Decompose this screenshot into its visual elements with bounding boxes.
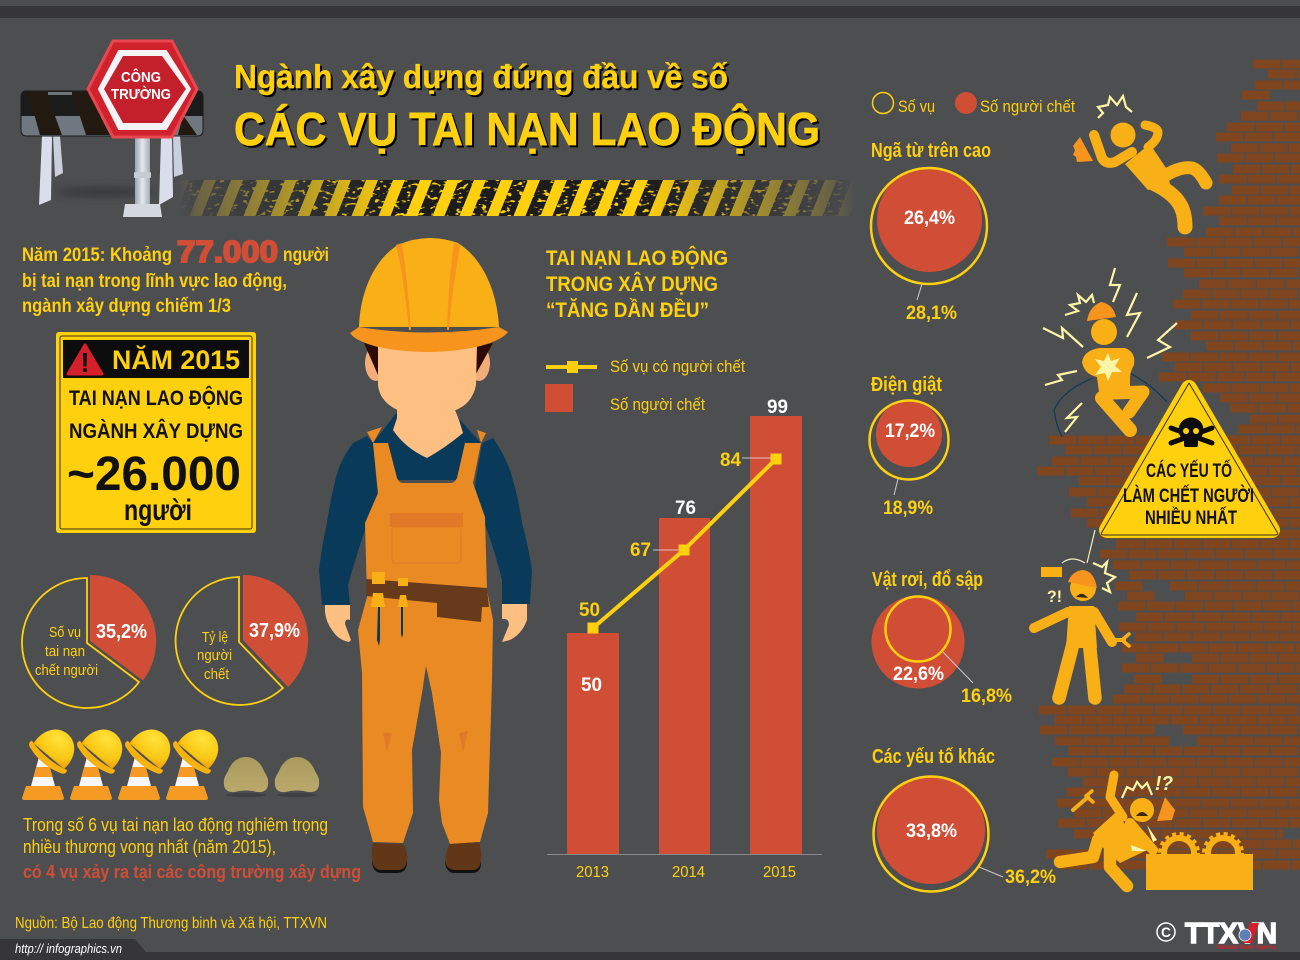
panel: điện giật: 17,2%: [885, 421, 935, 442]
pie chart: số vụ tai nạn chết người: tai nạn: [45, 644, 85, 660]
website: http:// infographics.vn: [15, 941, 122, 956]
panel: 2015 warning sign: NGÀNH XÂY DỰNG: [69, 419, 243, 443]
brick wall: [1037, 64, 1300, 865]
icon: road barrier and construction sign: [21, 41, 203, 217]
icon: road barrier and construction sign: CÔNG: [121, 68, 161, 86]
heading: chart title: “TĂNG DẦN ĐỀU”: [546, 299, 709, 322]
icon: worker struck by falling object: ?!: [1047, 587, 1062, 606]
panel: ngã từ trên cao: [871, 140, 991, 324]
heading: chart title: TRONG XÂY DỰNG: [546, 272, 718, 296]
intro text: người: [283, 245, 329, 266]
value labels: 50: [581, 675, 602, 696]
panel: vật rơi, đổ sập: 16,8%: [961, 686, 1012, 707]
year labels: 2013: [576, 864, 609, 881]
panel: 2015 warning sign: !: [80, 347, 90, 378]
heading: chart title: [546, 246, 728, 322]
intro text: [22, 234, 329, 317]
intro text: Năm 2015: Khoảng: [22, 245, 172, 266]
warning triangle: deadliest factors: CÁC YẾU TỐ: [1146, 460, 1232, 482]
logo: TTXVN: TTXVN: [1185, 918, 1277, 950]
panel: 2015 warning sign: NĂM 2015: [112, 344, 240, 375]
pie chart: tỷ lệ người chết: người: [197, 648, 232, 664]
panel: điện giật: 18,9%: [883, 498, 933, 519]
warning triangle: deadliest factors: LÀM CHẾT NGƯỜI: [1123, 485, 1254, 507]
pie chart: số vụ tai nạn chết người: chết người: [35, 663, 98, 679]
circle legend: [872, 92, 1075, 116]
chart legend: Số vụ có người chết: [610, 357, 745, 376]
bottom dark band: [0, 939, 1300, 960]
panel: ngã từ trên cao: 28,1%: [906, 303, 957, 324]
icon: worker caught in machine: [1060, 773, 1253, 890]
pie chart: tỷ lệ người chết: chết: [204, 667, 229, 683]
tool belt: [366, 579, 489, 622]
year labels: [576, 864, 796, 881]
icon: warning triangle: [68, 345, 102, 374]
undershirt and collar: [373, 412, 481, 480]
ears: [365, 345, 387, 381]
pie chart: tỷ lệ người chết: Tỷ lệ: [202, 630, 228, 646]
panel: điện giật: Điện giật: [871, 374, 942, 396]
year labels: 2015: [763, 864, 796, 881]
icon: falling worker: [1073, 96, 1206, 227]
neck: [393, 405, 463, 458]
title: CÁC VỤ TAI NẠN LAO ĐỘNG: [234, 103, 820, 155]
panel: 2015 warning sign: TAI NẠN LAO ĐỘNG: [69, 386, 243, 410]
warning triangle: deadliest factors: [1101, 383, 1278, 535]
shoes: [372, 845, 481, 873]
panel: 2015 warning sign: ~26.000: [67, 448, 241, 501]
panel: ngã từ trên cao: Ngã từ trên cao: [871, 140, 991, 162]
panel: các yếu tố khác: [872, 746, 1056, 892]
bars: [567, 416, 802, 854]
panel: 2015 warning sign: người: [124, 494, 192, 527]
panel: vật rơi, đổ sập: 22,6%: [893, 664, 944, 685]
circle legend: Số vụ: [898, 98, 935, 116]
panel: 2015 warning sign: [56, 332, 256, 533]
bib pocket: [392, 527, 461, 563]
heading: chart title: TAI NẠN LAO ĐỘNG: [546, 246, 728, 270]
icons: four helmets on cones: [22, 719, 230, 800]
pie chart: tỷ lệ người chết: 37,9%: [249, 620, 300, 642]
bar and line chart: [547, 397, 822, 881]
knee folds: [383, 731, 468, 752]
helmet: [359, 238, 499, 327]
text block: six serious accidents: có 4 vụ xảy ra tại các công trường xây dựng: [23, 862, 361, 882]
hands: [325, 604, 527, 642]
face: [378, 345, 477, 418]
logo: TTXVN: C: [1161, 924, 1171, 940]
value labels: [579, 397, 788, 696]
intro text: bị tai nạn trong lĩnh vực lao động,: [22, 271, 287, 292]
hair: [364, 343, 493, 375]
text block: six serious accidents: [23, 815, 361, 882]
panel: các yếu tố khác: 36,2%: [1005, 867, 1056, 888]
panel: vật rơi, đổ sập: [872, 569, 1012, 707]
worker illustration: [319, 238, 532, 873]
value labels: 99: [767, 397, 788, 418]
title: Ngành xây dựng đứng đầu về số: [234, 58, 728, 95]
intro text: ngành xây dựng chiếm 1/3: [22, 296, 231, 317]
icon: worker caught in machine: !?: [1155, 773, 1173, 795]
value labels: 84: [720, 450, 741, 471]
circle legend: Số người chết: [980, 98, 1075, 116]
panel: các yếu tố khác: 33,8%: [906, 821, 957, 842]
line series: [588, 454, 782, 634]
icon: road barrier and construction sign: TRƯỜNG: [111, 85, 171, 103]
panel: vật rơi, đổ sập: Vật rơi, đổ sập: [872, 569, 983, 591]
logo: TTXVN: Vietnam News Agency: [1216, 945, 1277, 951]
panel: điện giật: [870, 374, 948, 519]
chart legend: Số người chết: [610, 395, 705, 414]
year labels: 2014: [672, 864, 705, 881]
value labels: 67: [630, 540, 651, 561]
top dark band: [0, 6, 1300, 18]
tools: [377, 607, 403, 646]
pie chart: tỷ lệ người chết: [176, 575, 308, 705]
chart legend: [545, 357, 745, 414]
icons: two faded helmets: [224, 757, 319, 797]
intro text: 77.000: [177, 234, 278, 269]
value labels: 76: [675, 498, 696, 519]
sleeves: [319, 436, 532, 605]
title: [234, 58, 820, 155]
warning triangle: deadliest factors: NHIỀU NHẤT: [1145, 507, 1237, 529]
icon: worker struck by falling object: [1034, 530, 1129, 698]
source: Nguồn: Bộ Lao động Thương binh và Xã hội, TTXVN: [15, 915, 327, 932]
icon: skull and crossbones: [1171, 418, 1212, 447]
pie chart: số vụ tai nạn chết người: [22, 575, 156, 708]
panel: các yếu tố khác: Các yếu tố khác: [872, 746, 995, 768]
value labels: 50: [579, 600, 600, 621]
overalls: [358, 427, 493, 844]
text block: six serious accidents: nhiều thương vong nhất (năm 2015),: [23, 837, 276, 857]
pie chart: số vụ tai nạn chết người: Số vụ: [49, 625, 81, 641]
icon: electrocuted worker: [1043, 268, 1177, 437]
text block: six serious accidents: Trong số 6 vụ tai nạn lao động nghiêm trọng: [23, 815, 328, 835]
panel: ngã từ trên cao: 26,4%: [904, 208, 955, 229]
pie chart: số vụ tai nạn chết người: 35,2%: [96, 621, 147, 643]
hazard tape: [178, 180, 855, 216]
